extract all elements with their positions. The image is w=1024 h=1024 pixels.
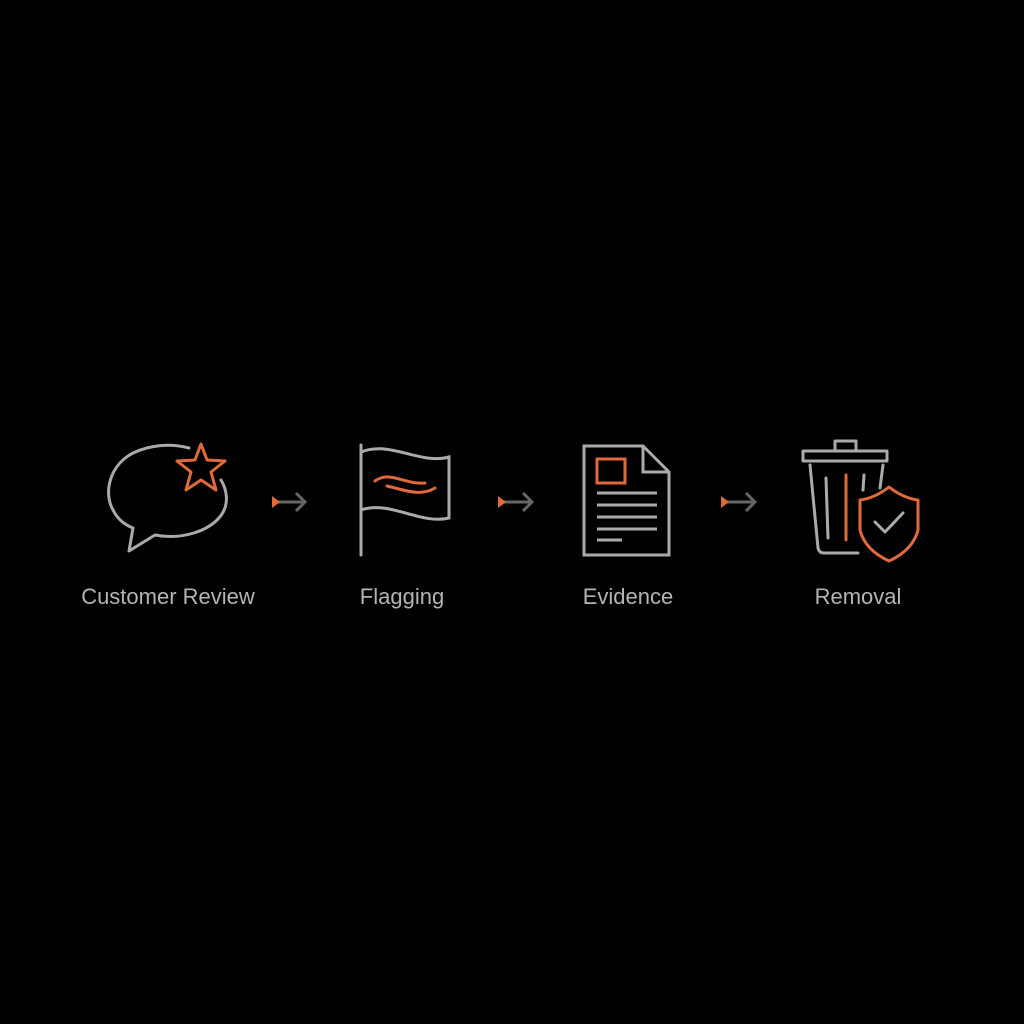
arrow 2 bbox=[498, 493, 532, 511]
arrow 3 bbox=[721, 493, 755, 511]
labels: Removal bbox=[815, 584, 901, 609]
icon: flag bbox=[361, 445, 449, 555]
labels: Customer Review bbox=[81, 584, 255, 609]
labels bbox=[81, 584, 901, 609]
icon: document bbox=[584, 446, 669, 555]
arrow 1 bbox=[272, 493, 305, 511]
icon: review bubble bbox=[109, 444, 226, 551]
icon: trash with shield bbox=[803, 441, 918, 561]
labels: Flagging bbox=[360, 584, 444, 609]
labels: Evidence bbox=[583, 584, 673, 609]
